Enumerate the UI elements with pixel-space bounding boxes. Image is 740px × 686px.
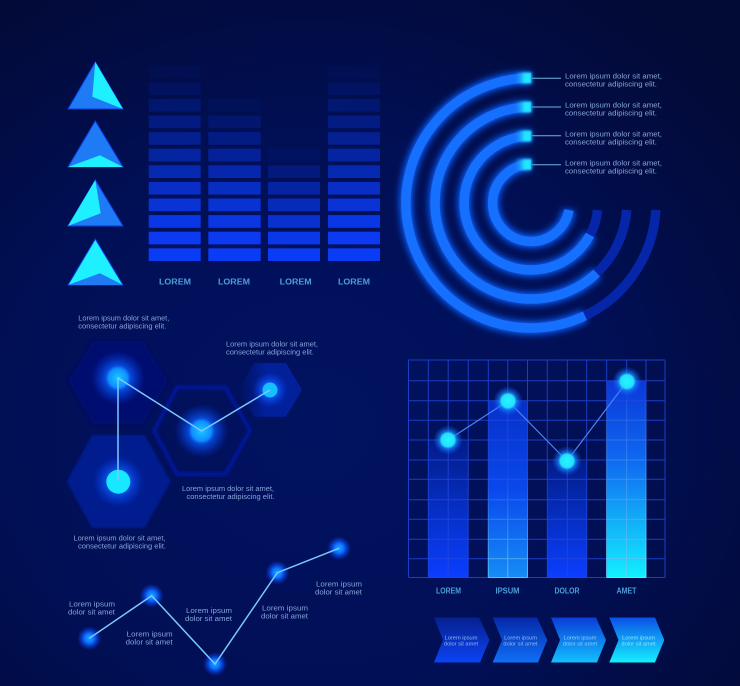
- ring connector lines: [532, 78, 561, 165]
- bar and line chart: [408, 360, 665, 578]
- chart labels: AMET: [616, 586, 637, 595]
- chart labels: LOREM: [436, 586, 461, 595]
- bar chart labels: LOREM: [218, 276, 250, 286]
- hexagon outline: [154, 388, 250, 474]
- arrow 1: dolor sit amet: [444, 642, 478, 648]
- bar chart labels: LOREM: [159, 276, 191, 286]
- arrow 2: Lorem ipsum: [504, 636, 537, 642]
- chart labels: DOLOR: [554, 586, 580, 595]
- ring glowing caps: [514, 72, 532, 170]
- hexagon captions: [74, 314, 318, 550]
- hexagon dark: [68, 341, 168, 424]
- chart line: [448, 382, 627, 461]
- ring captions: [565, 72, 662, 176]
- hexagon right: [238, 363, 302, 417]
- ring captions: consectetur adipiscing elit.: [565, 80, 657, 88]
- arrow 1: [434, 618, 490, 662]
- line chart captions: Lorem ipsum: [69, 600, 115, 608]
- bright gridlines in bar 4: [607, 400, 646, 578]
- arrow 3: [551, 618, 606, 662]
- hexagon captions: consectetur adipiscing elit.: [186, 492, 274, 501]
- node glows: [91, 351, 288, 508]
- chart labels: [436, 586, 637, 595]
- bar chart labels: LOREM: [338, 276, 370, 286]
- icon: triangle 2: [68, 121, 123, 167]
- ring glow: [406, 78, 597, 328]
- bar chart: segmented equalizer: [149, 66, 380, 261]
- ring captions: Lorem ipsum dolor sit amet,: [565, 158, 662, 168]
- line chart captions: Lorem ipsum: [262, 604, 308, 612]
- arrow 4: [609, 618, 664, 662]
- panel: triangle icons: [68, 62, 123, 285]
- radial progress chart: [406, 72, 656, 328]
- hexagon captions: Lorem ipsum dolor sit amet,: [74, 534, 166, 542]
- hexagon captions: Lorem ipsum dolor sit amet,: [182, 484, 274, 493]
- bar chart labels: [159, 276, 370, 286]
- hexagon network: [67, 341, 302, 528]
- icon: triangle 4: [68, 239, 123, 285]
- line chart: [77, 536, 351, 676]
- ring captions: consectetur adipiscing elit.: [565, 108, 657, 118]
- ring captions: consectetur adipiscing elit.: [565, 166, 657, 176]
- hexagon captions: consectetur adipiscing elit.: [78, 322, 166, 330]
- arrow 3: dolor sit amet: [563, 642, 597, 648]
- chart grid: [408, 360, 665, 578]
- hexagon captions: Lorem ipsum dolor sit amet,: [226, 340, 318, 348]
- line chart captions: dolor sit amet: [315, 588, 363, 596]
- line chart captions: Lorem ipsum: [186, 606, 232, 615]
- arrow 3: Lorem ipsum: [564, 636, 597, 642]
- line chart captions: dolor sit amet: [261, 612, 309, 620]
- arrow 4: Lorem ipsum: [622, 636, 655, 642]
- ring dim tails: [585, 210, 656, 316]
- chart labels: IPSUM: [496, 586, 520, 595]
- ring captions: Lorem ipsum dolor sit amet,: [565, 130, 662, 138]
- line chart captions: dolor sit amet: [126, 638, 174, 646]
- arrow 4: dolor sit amet: [621, 642, 656, 648]
- arrow 2: [493, 618, 547, 662]
- icon: triangle 3: [68, 180, 123, 226]
- bar chart labels: LOREM: [280, 276, 312, 286]
- ring bright arcs: [406, 78, 597, 328]
- icon: triangle 1: [68, 62, 123, 109]
- line chart path: [89, 548, 339, 664]
- network lines: [118, 378, 270, 481]
- arrow 2: dolor sit amet: [503, 642, 538, 648]
- line chart captions: Lorem ipsum: [127, 630, 173, 638]
- hexagon captions: consectetur adipiscing elit.: [78, 542, 166, 550]
- line chart captions: dolor sit amet: [185, 614, 233, 623]
- line chart captions: [68, 580, 363, 646]
- bar column 2: [208, 99, 261, 261]
- line chart captions: dolor sit amet: [68, 608, 116, 616]
- hexagon captions: Lorem ipsum dolor sit amet,: [78, 314, 169, 322]
- line chart glows: [77, 536, 351, 676]
- ring captions: consectetur adipiscing elit.: [565, 138, 657, 146]
- bright gridlines in bar 2: [488, 470, 528, 578]
- chart points: [433, 366, 642, 476]
- bar column 3: [268, 149, 320, 261]
- bar column 1: [149, 66, 201, 261]
- bar column 4: [328, 66, 380, 261]
- line chart captions: Lorem ipsum: [316, 580, 362, 588]
- hexagon filled lower: [67, 435, 171, 528]
- hexagon captions: consectetur adipiscing elit.: [226, 348, 314, 356]
- arrow steps: [434, 618, 664, 662]
- ring captions: Lorem ipsum dolor sit amet,: [565, 72, 662, 80]
- ring captions: Lorem ipsum dolor sit amet,: [565, 100, 662, 110]
- chart bars: [428, 381, 646, 578]
- arrow 1: Lorem ipsum: [445, 636, 478, 642]
